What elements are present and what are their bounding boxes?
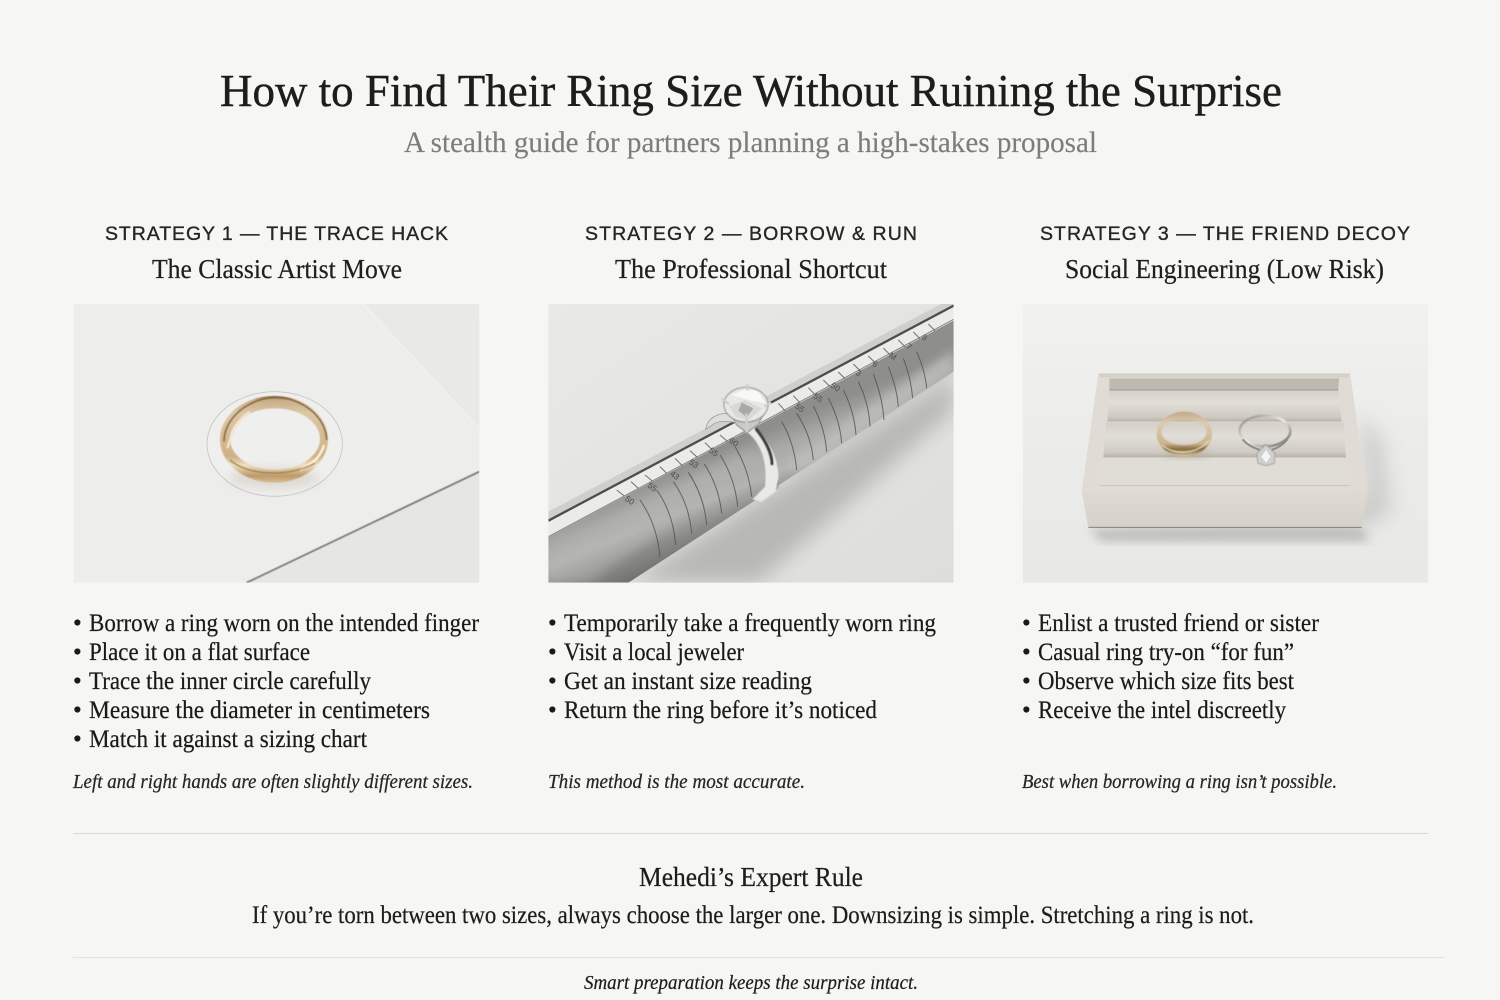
strategy 1 bullets: •	[73, 639, 82, 666]
mandrel scale numbers: 50	[829, 380, 842, 394]
panel: strategy 1	[72, 223, 480, 793]
strategy 1 bullets: •	[73, 726, 82, 753]
strategy 1 bullets	[73, 610, 480, 753]
strategy 2 heading: The Professional Shortcut	[615, 254, 887, 284]
strategy 2 bullets: •	[548, 639, 557, 666]
image: rings in a velvet tray	[1023, 356, 1428, 582]
mandrel scale numbers: 53	[687, 457, 701, 470]
strategy 3 heading: Social Engineering (Low Risk)	[1065, 254, 1384, 284]
mandrel scale numbers: 55	[707, 445, 721, 459]
panel: strategy 3	[1022, 223, 1428, 793]
mandrel scale numbers: 55	[812, 391, 825, 404]
strategy 3 bullets: •	[1022, 668, 1031, 695]
strategy 2 bullets: Get an instant size reading	[564, 668, 812, 695]
mandrel scale numbers: M	[887, 350, 899, 362]
strategy 2 bullets: Visit a local jeweler	[564, 639, 745, 666]
silver ring	[1240, 416, 1290, 466]
strategy 1 label: STRATEGY 1 — THE TRACE HACK	[105, 223, 448, 245]
strategy 2 bullets: •	[548, 697, 557, 724]
strategy 3 label: STRATEGY 3 — THE FRIEND DECOY	[1040, 223, 1410, 245]
strategy 1 note: Left and right hands are often slightly different sizes.	[72, 771, 473, 793]
strategy 1 bullets: •	[73, 697, 82, 724]
strategy 1 heading: The Classic Artist Move	[152, 254, 402, 284]
strategy 3 bullets: Enlist a trusted friend or sister	[1038, 610, 1320, 637]
strategy 3 bullets: Receive the intel discreetly	[1038, 697, 1286, 724]
strategy 3 bullets: •	[1022, 610, 1031, 637]
title: How to Find Their Ring Size Without Ruining the Surprise	[220, 65, 1282, 116]
mandrel scale numbers: 55	[793, 401, 807, 414]
strategy 2 bullets: Return the ring before it’s noticed	[564, 697, 877, 724]
diamond ring	[706, 384, 778, 502]
strategy 2 bullets: •	[548, 610, 557, 637]
panel: strategy 2	[548, 223, 954, 793]
strategy 1 bullets: •	[73, 668, 82, 695]
strategy 2 bullets: Temporarily take a frequently worn ring	[564, 610, 936, 637]
expert rule callout	[252, 862, 1254, 929]
strategy 2 label: STRATEGY 2 — BORROW & RUN	[585, 223, 917, 245]
mandrel scale numbers: 7	[905, 341, 914, 352]
strategy 3 bullets: Casual ring try-on “for fun”	[1038, 639, 1294, 666]
strategy 2 bullets: •	[548, 668, 557, 695]
strategy 1 bullets: •	[73, 610, 82, 637]
mandrel scale numbers: 43	[668, 468, 682, 482]
mandrel scale numbers: 6	[871, 358, 880, 370]
strategy 1 bullets: Borrow a ring worn on the intended finger	[89, 610, 480, 637]
mandrel scale numbers: 8	[920, 332, 930, 343]
strategy 3 bullets: Observe which size fits best	[1038, 668, 1294, 695]
strategy 2 note: This method is the most accurate.	[548, 771, 805, 793]
strategy 3 bullets	[1022, 610, 1320, 724]
strategy 1 bullets: Trace the inner circle carefully	[89, 668, 371, 695]
image: gold ring on paper	[74, 304, 479, 583]
strategy 1 bullets: Place it on a flat surface	[89, 639, 310, 666]
strategy 3 bullets: •	[1022, 697, 1031, 724]
footer note: Smart preparation keeps the surprise intact.	[584, 972, 918, 994]
image: ring on sizing mandrel	[548, 297, 954, 583]
mandrel scale numbers: 3	[854, 367, 864, 379]
mandrel scale numbers: 50	[623, 493, 637, 507]
strategy 1 bullets: Match it against a sizing chart	[89, 726, 367, 753]
strategy 1 bullets: Measure the diameter in centimeters	[89, 697, 430, 724]
mandrel scale numbers: 55	[646, 480, 659, 494]
strategy 3 bullets: •	[1022, 639, 1031, 666]
mandrel scale numbers: 60	[727, 435, 741, 449]
strategy 2 bullets	[548, 610, 936, 724]
subtitle: A stealth guide for partners planning a high-stakes proposal	[404, 126, 1097, 159]
strategy 3 note: Best when borrowing a ring isn’t possible.	[1022, 771, 1337, 793]
gold ring	[1157, 412, 1212, 458]
expert rule heading: Mehedi’s Expert Rule	[639, 862, 863, 892]
expert rule text: If you’re torn between two sizes, always choose the larger one. Downsizing is simple. Stretching a ring is not.	[252, 902, 1254, 929]
mandrel scale numbers	[623, 332, 930, 507]
